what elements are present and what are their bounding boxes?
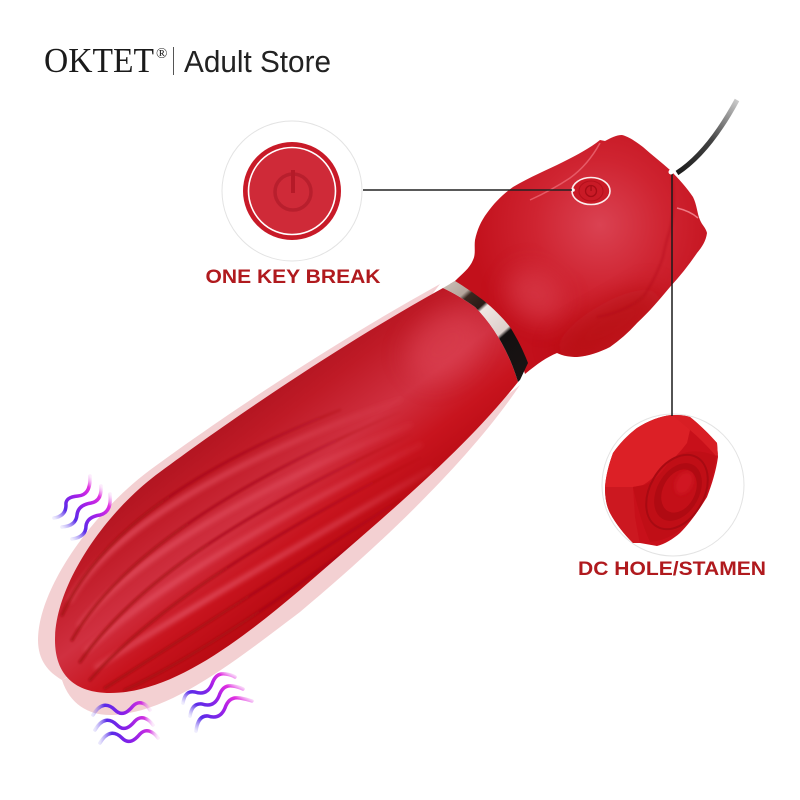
product head: rose bbox=[450, 135, 707, 374]
title: brand logo: OKTET bbox=[44, 41, 154, 80]
cable bbox=[677, 100, 737, 173]
icon: vibration waves bottom right bbox=[183, 674, 252, 731]
metal ring bbox=[443, 281, 528, 382]
icon: vibration waves bottom bbox=[93, 703, 158, 743]
title: brand logo: ® bbox=[156, 46, 167, 62]
ribbed texture bbox=[62, 295, 496, 690]
icon: vibration waves left bbox=[54, 476, 110, 539]
icon: small power button on head bbox=[571, 178, 610, 204]
motion blur halo around handle bbox=[38, 284, 520, 715]
callout: DC hole / stamen: DC HOLE/STAMEN bbox=[578, 559, 766, 580]
product body: handle bbox=[55, 288, 518, 693]
handle highlight near ring bbox=[408, 308, 476, 377]
title: brand logo bbox=[44, 41, 331, 80]
callout: one key break: ONE KEY BREAK bbox=[206, 266, 380, 288]
rose close-up bbox=[600, 412, 722, 546]
callout: DC hole / stamen bbox=[578, 170, 766, 580]
callout: one key break bbox=[206, 121, 572, 288]
title: brand logo: Adult Store bbox=[184, 44, 331, 79]
